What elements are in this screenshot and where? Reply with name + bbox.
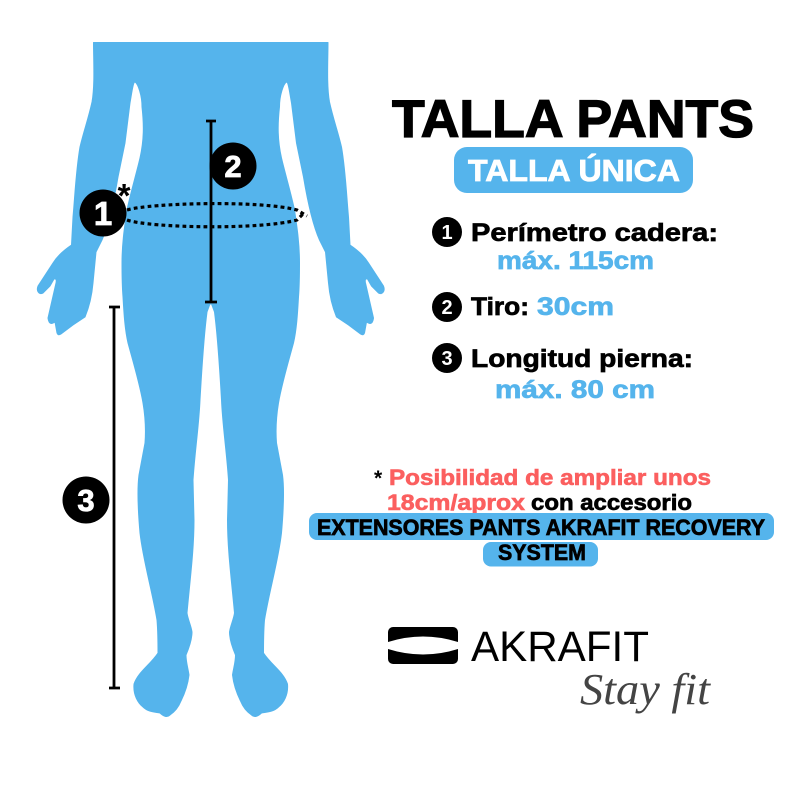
marker 2: 2	[224, 149, 242, 184]
logo: AKRAFIT	[471, 623, 649, 671]
measurement 1: hip perimeter: Perímetro cadera:	[471, 219, 718, 247]
marker 3	[62, 476, 110, 524]
note about extension: Posibilidad de ampliar unos	[389, 465, 711, 490]
accessory highlight	[309, 513, 774, 566]
measurement 2: rise: 30cm	[537, 293, 614, 321]
accessory highlight: SYSTEM	[498, 540, 586, 565]
marker 3: 3	[77, 483, 95, 518]
note about extension: con accesorio	[531, 490, 692, 515]
marker 2	[210, 142, 256, 190]
body silhouette	[37, 42, 384, 716]
measurement 3: leg length: Longitud pierna:	[471, 345, 693, 373]
size badge	[454, 147, 693, 193]
measurement 1: hip perimeter: máx. 115cm	[497, 247, 654, 275]
title: TALLA PANTS	[392, 90, 754, 149]
marker 1 with asterisk	[80, 177, 131, 236]
logo	[388, 623, 649, 671]
marker 1 with asterisk: *	[118, 177, 131, 214]
size badge: TALLA ÚNICA	[468, 152, 680, 188]
measurement 2: rise: Tiro:	[471, 293, 529, 321]
note about extension: 18cm/aprox	[387, 490, 526, 515]
measurement 2: rise: 2	[441, 297, 453, 319]
measurement 3: leg length: máx. 80 cm	[495, 376, 655, 404]
measurement 1: hip perimeter: 1	[441, 222, 453, 244]
measurement 2: rise	[432, 292, 614, 322]
measurement 1: hip perimeter	[432, 217, 718, 275]
measurement 3: leg length: 3	[441, 348, 453, 370]
note about extension: *	[374, 467, 383, 490]
measure 1: hip perimeter dotted ellipse	[127, 204, 307, 227]
measure 3: leg length line	[109, 307, 120, 688]
note about extension	[374, 465, 711, 515]
accessory highlight: EXTENSORES PANTS AKRAFIT RECOVERY	[317, 515, 765, 540]
measure 2: rise line	[205, 121, 217, 302]
marker 1 with asterisk: 1	[94, 195, 112, 232]
tagline: Stay fit	[580, 665, 712, 714]
measurement 3: leg length	[432, 343, 693, 404]
